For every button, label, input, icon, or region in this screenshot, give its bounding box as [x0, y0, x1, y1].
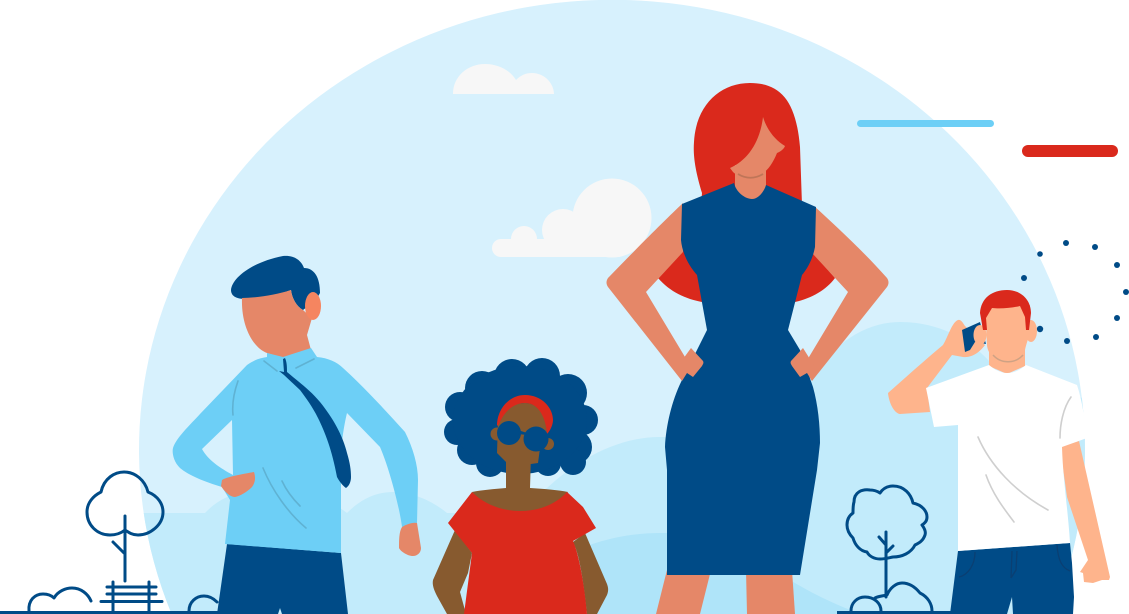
tree and bench: left [29, 472, 217, 611]
chin shadow [738, 174, 763, 178]
bar: red [1022, 145, 1118, 157]
jeans seams [959, 545, 1070, 578]
headband [497, 395, 553, 434]
tie [279, 358, 351, 488]
trousers [217, 544, 348, 614]
arm: right [805, 206, 888, 381]
sunglasses [497, 421, 548, 452]
hair [980, 290, 1031, 330]
afro hair [444, 358, 598, 477]
ears [974, 325, 986, 345]
face and neck [242, 290, 312, 358]
face [730, 117, 785, 178]
head and neck [985, 305, 1030, 374]
dress [665, 183, 820, 575]
arm: left [606, 203, 690, 381]
signal dots [1021, 240, 1129, 344]
long hair behind shoulders [658, 250, 835, 302]
person: woman in blue dress [606, 83, 888, 614]
arms [433, 530, 472, 614]
jeans [950, 543, 1074, 614]
cloud: center [492, 178, 652, 258]
person: man in blue shirt [173, 256, 421, 614]
shirt folds [233, 359, 314, 528]
legs [656, 570, 711, 614]
hair [694, 83, 802, 205]
raised arm and hand [888, 320, 985, 414]
background hills [139, 322, 1090, 614]
ground line: right [837, 611, 957, 614]
ear [305, 292, 321, 320]
person: man on phone [888, 290, 1110, 614]
head [497, 403, 547, 464]
hand: right [399, 523, 421, 556]
neck [735, 165, 766, 202]
ears [490, 428, 504, 440]
red top [448, 492, 596, 614]
cloud: top [453, 64, 554, 94]
ground line: left [0, 611, 240, 614]
bar: light blue [857, 120, 994, 127]
tree and bushes: right [847, 486, 932, 611]
white t-shirt [926, 365, 1087, 551]
person: woman with afro [433, 358, 608, 614]
shirt [173, 348, 418, 553]
hand: left [675, 348, 703, 381]
hand: right [791, 348, 818, 381]
shirt folds [978, 397, 1071, 522]
right arm [1060, 441, 1110, 583]
neck and shoulders [472, 455, 568, 520]
phone [962, 322, 986, 352]
hand: left [221, 472, 255, 497]
neck line [993, 355, 1023, 362]
hair [231, 256, 320, 310]
